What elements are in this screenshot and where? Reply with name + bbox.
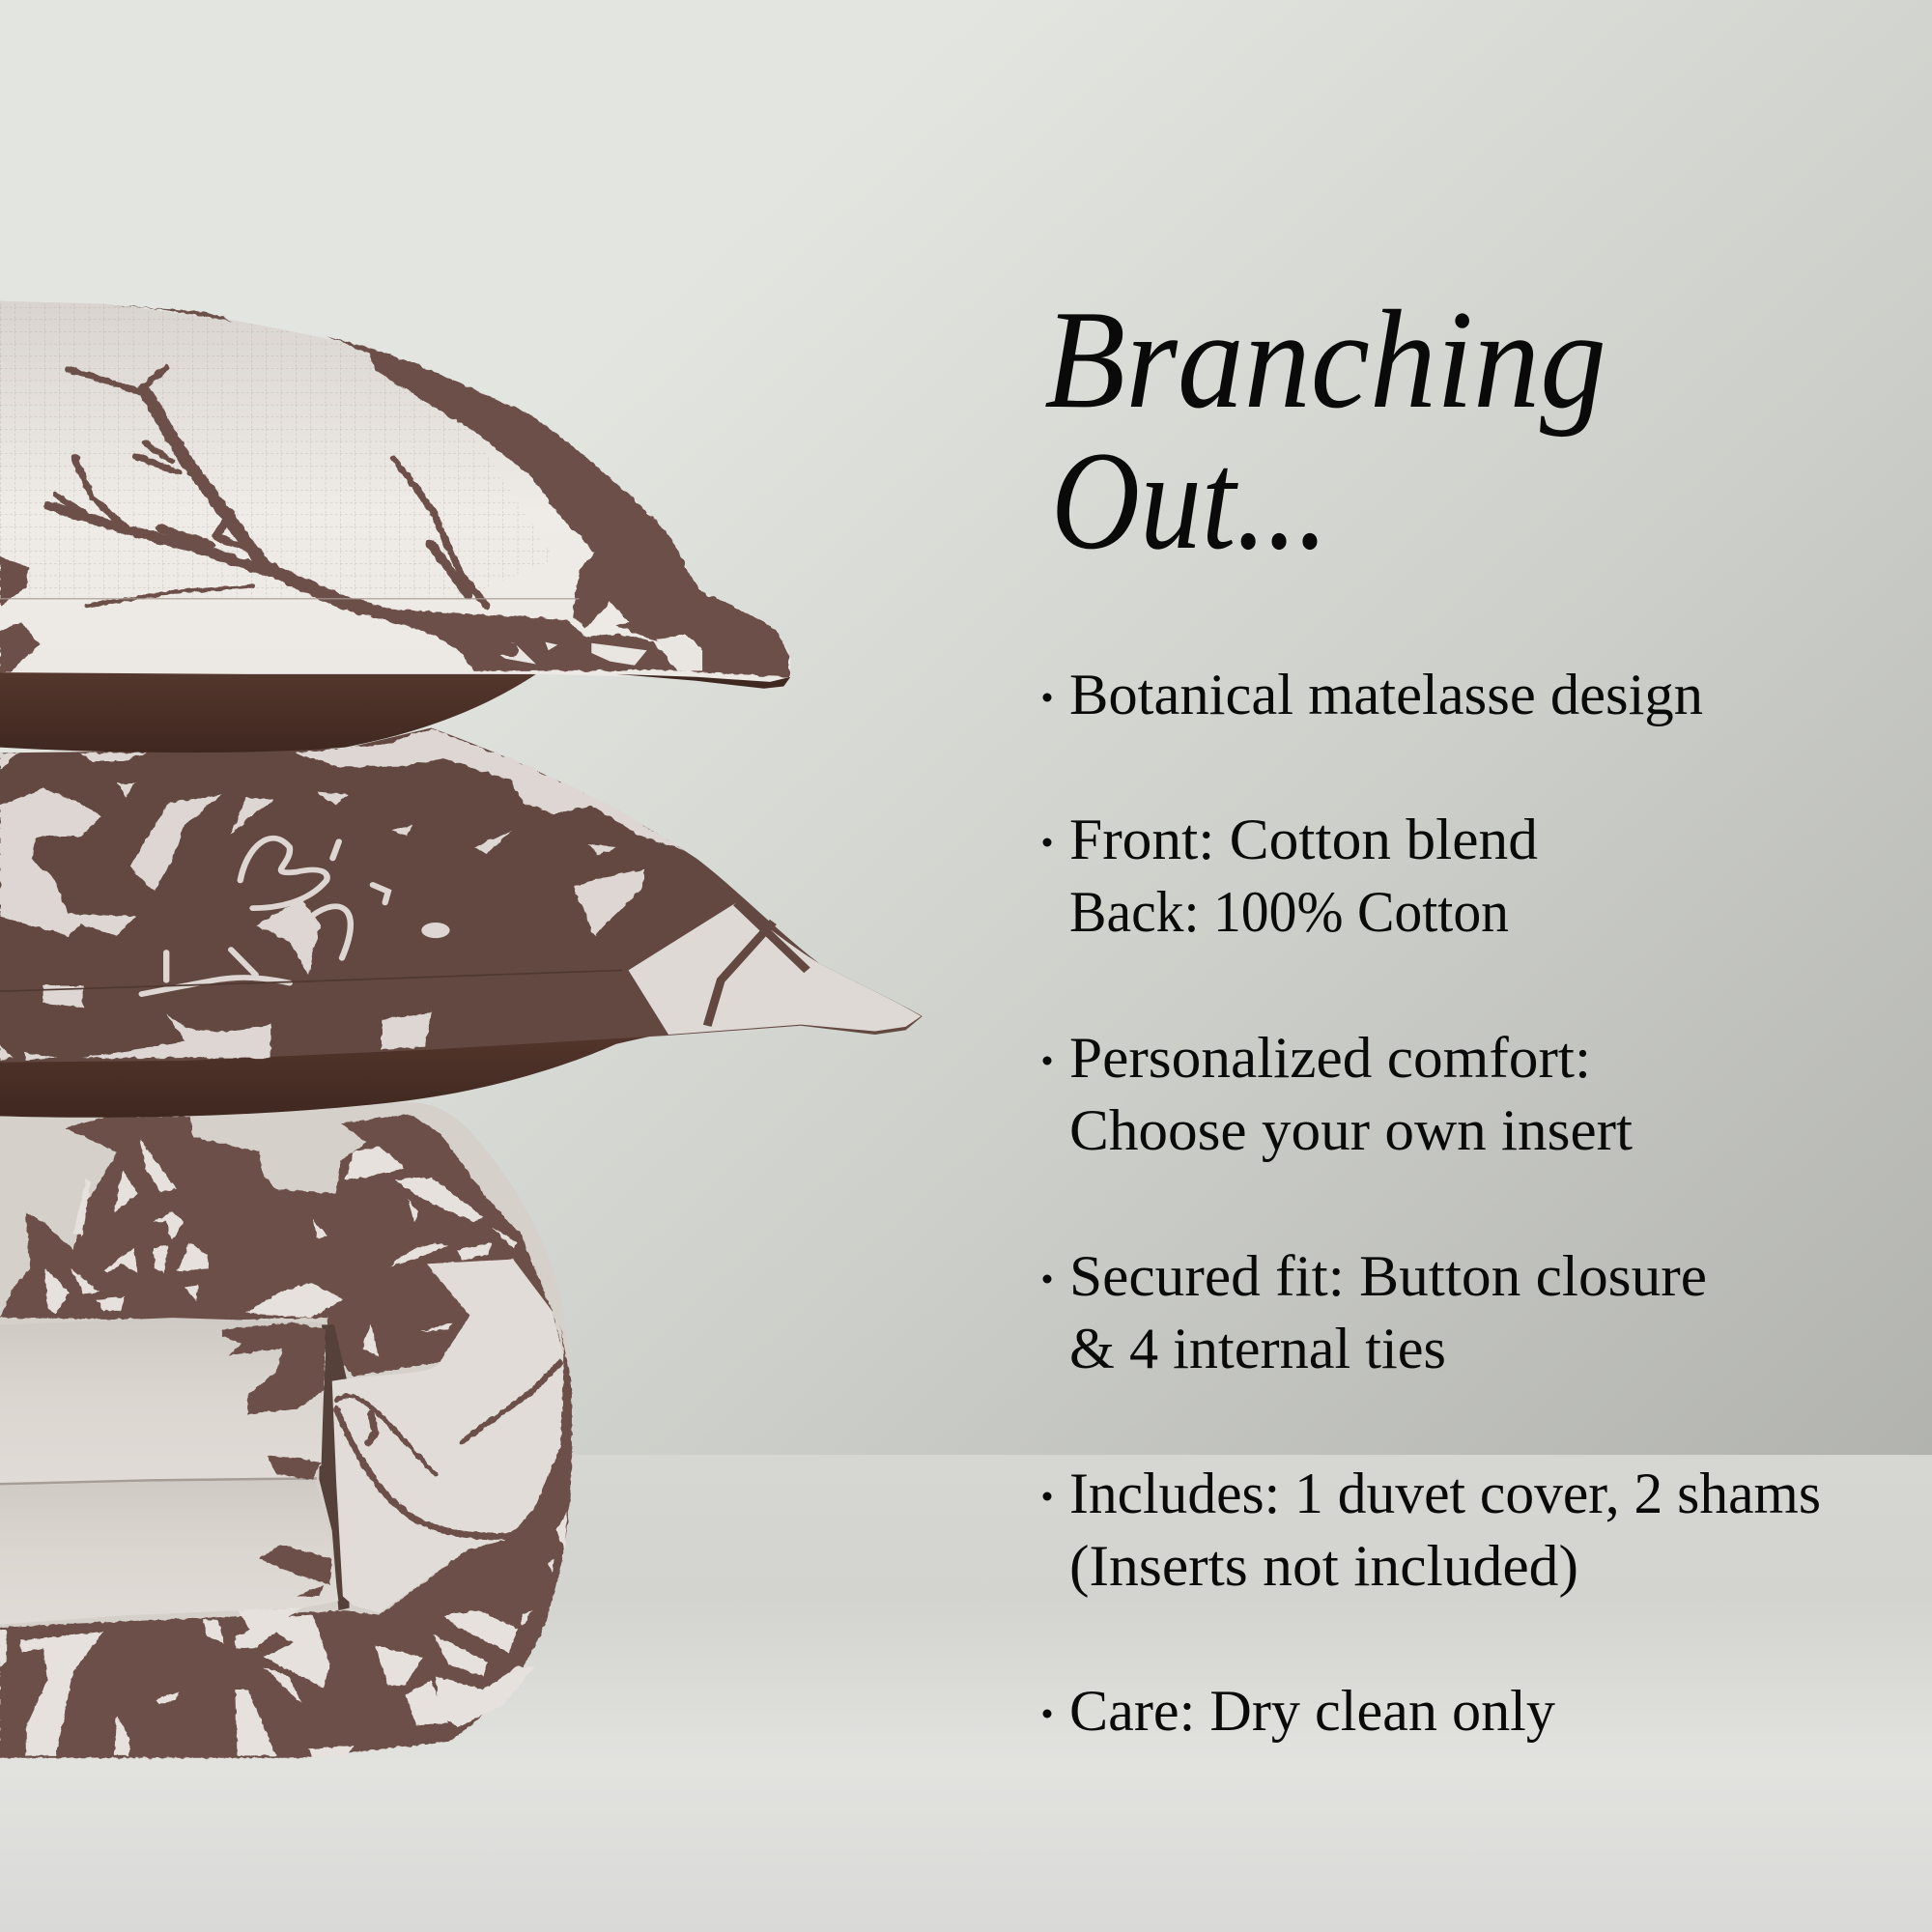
bullet: includes: (Inserts not included) xyxy=(1069,1534,1578,1598)
upper sham: light botanical pillow xyxy=(0,301,790,753)
lower sham small dot xyxy=(421,923,450,938)
upper sham left blobs xyxy=(0,556,40,672)
bullet: fabric xyxy=(1043,808,1538,944)
upper sham band cream fragments xyxy=(480,637,702,670)
title xyxy=(1044,281,1606,579)
bullet: fabric: Back: 100% Cotton xyxy=(1069,880,1509,944)
bullet: includes: Includes: 1 duvet cover, 2 shams xyxy=(1069,1462,1821,1525)
bullet: fit xyxy=(1043,1244,1707,1380)
lower sham body xyxy=(0,728,923,1063)
upper sham underside xyxy=(0,669,536,753)
duvet lower wrap xyxy=(0,1324,572,1758)
background: wall xyxy=(0,0,1932,1455)
bullet: comfort: Personalized comfort: xyxy=(1069,1026,1591,1090)
bullet: fit: Secured fit: Button closure xyxy=(1069,1244,1707,1308)
upper sham border band pattern xyxy=(382,609,678,670)
bullet: care: Care: Dry clean only xyxy=(1069,1679,1555,1743)
title line 1: Branching xyxy=(1044,281,1606,438)
lower sham: dark botanical pillow xyxy=(0,728,923,1118)
duvet fold shadow gap xyxy=(319,1324,350,1610)
title line 2: Out... xyxy=(1051,422,1328,579)
duvet: folded botanical duvet cover xyxy=(0,1102,572,1758)
duvet right roll branches xyxy=(336,1362,560,1536)
lower sham cream fragments xyxy=(0,783,644,1061)
background: floor xyxy=(0,1455,1932,1932)
feature list xyxy=(1043,663,1821,1743)
duvet lower wrap cream fragments xyxy=(0,1512,567,1758)
lower sham underside xyxy=(0,1025,666,1118)
duvet upper fold xyxy=(0,1318,326,1483)
duvet fold crease xyxy=(0,1478,317,1484)
lower sham right corner cream xyxy=(629,902,922,1035)
duvet fold pattern xyxy=(222,1322,332,1597)
upper sham quilting xyxy=(0,301,554,598)
lower sham top cream edge xyxy=(0,729,684,850)
duvet lower fold xyxy=(0,1479,338,1625)
bullet: fit: & 4 internal ties xyxy=(1069,1317,1446,1380)
duvet right roll cream panel xyxy=(332,1260,567,1613)
upper sham flange stitch xyxy=(0,598,580,600)
lower sham curl motif xyxy=(142,838,388,994)
bullet: includes xyxy=(1043,1462,1821,1598)
upper sham branches xyxy=(49,367,511,650)
duvet top roll cream fragments xyxy=(45,1140,518,1357)
duvet silhouette xyxy=(0,1102,572,1758)
bullet: fabric: Front: Cotton blend xyxy=(1069,808,1538,871)
bullet: comfort: Choose your own insert xyxy=(1069,1098,1633,1162)
upper sham brown corner xyxy=(104,305,789,677)
lower sham flange stitch xyxy=(0,970,622,991)
bullet: comfort xyxy=(1043,1026,1633,1162)
upper sham body xyxy=(0,301,790,684)
duvet top roll pattern xyxy=(0,1114,560,1377)
upper sham dark piping xyxy=(616,674,790,689)
lower sham corner branches xyxy=(707,902,808,1026)
bullet: botanical design: Botanical matelasse design xyxy=(1069,663,1703,726)
